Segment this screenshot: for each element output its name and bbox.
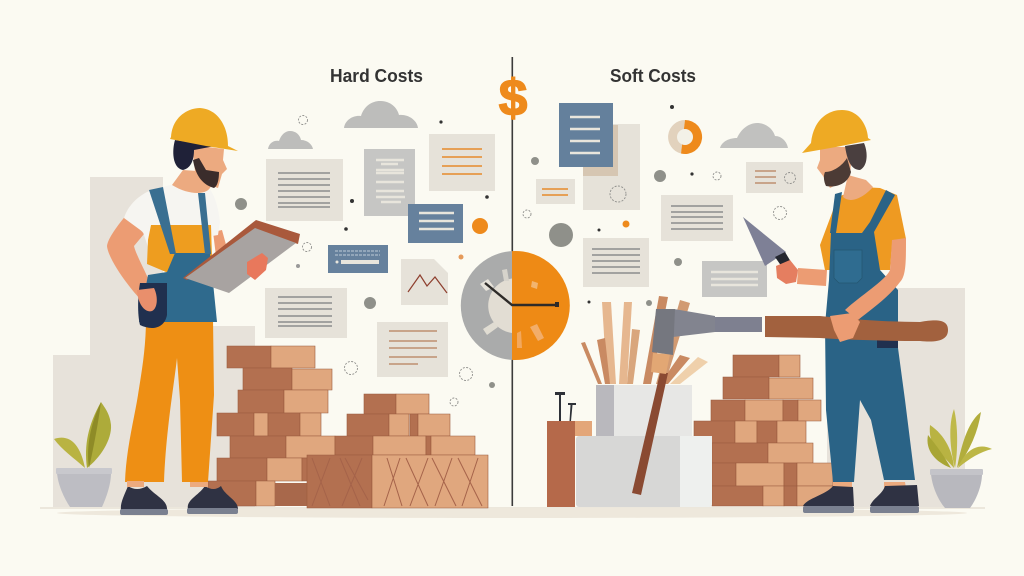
floor band bbox=[40, 507, 985, 518]
hand on hammer bbox=[830, 313, 860, 342]
title: Soft Costs: Soft Costs bbox=[610, 66, 696, 86]
orange shirt lower bbox=[147, 225, 212, 272]
title: Hard Costs: Hard Costs bbox=[330, 66, 423, 86]
wood sticks bbox=[581, 296, 708, 384]
panel: soft blue document bbox=[559, 103, 613, 167]
decorative dots bbox=[235, 105, 694, 388]
tool pouch bbox=[138, 283, 167, 328]
hammer handle end behind worker bbox=[632, 353, 670, 495]
left arm holding trowel bbox=[797, 268, 827, 286]
hand left bbox=[137, 288, 157, 311]
bib pocket bbox=[834, 250, 862, 283]
panel: hard orange-lines document bbox=[429, 134, 495, 191]
hand holding trowel bbox=[776, 260, 798, 284]
panel: soft beige document bbox=[583, 124, 640, 210]
panel: hard blue card bbox=[408, 204, 463, 243]
overalls bbox=[825, 190, 915, 482]
panel: soft small card bbox=[536, 179, 575, 204]
decorative gear icons bbox=[298, 116, 786, 406]
tablet bbox=[183, 220, 300, 280]
pants bbox=[125, 318, 214, 482]
clock bbox=[461, 251, 570, 360]
panel: soft document 1 bbox=[661, 195, 733, 241]
bricks: right stack bbox=[694, 355, 833, 506]
apron bbox=[139, 253, 217, 322]
background wall blocks bbox=[53, 177, 965, 507]
trowel bbox=[743, 217, 791, 267]
cloud: hard small bbox=[268, 131, 313, 149]
panel: hard document 1 bbox=[266, 159, 343, 221]
hair bbox=[845, 143, 867, 170]
shoes: soft costs worker bbox=[803, 482, 919, 513]
beard bbox=[824, 158, 851, 186]
white box lower bbox=[576, 436, 712, 507]
bricks: center stack bbox=[335, 394, 475, 455]
icon: dollar sign: $ bbox=[499, 69, 527, 126]
pocket below handle bbox=[877, 340, 898, 348]
white box upper bbox=[596, 385, 692, 436]
panel: hard line chart bbox=[401, 259, 448, 305]
white shirt bbox=[124, 185, 220, 247]
beard bbox=[193, 158, 219, 188]
cloud: hard large bbox=[344, 101, 418, 128]
worker: soft costs bbox=[797, 110, 915, 482]
icon: donut chart bbox=[668, 120, 702, 154]
nails on block bbox=[547, 392, 592, 507]
upper body shirt bbox=[820, 187, 906, 270]
right arm bbox=[845, 238, 906, 320]
panel: soft document 2 bbox=[583, 238, 649, 287]
hard hat bbox=[170, 108, 238, 151]
left worker shoes bbox=[120, 481, 238, 515]
bricks: left stack bbox=[208, 346, 335, 506]
worker: hard costs bbox=[107, 108, 300, 515]
plant right bbox=[927, 409, 992, 508]
right forearm bbox=[213, 230, 228, 256]
hand holding tablet bbox=[247, 253, 268, 280]
neck and head bbox=[843, 175, 873, 200]
plant left bbox=[54, 402, 112, 507]
panel: hard document 3 bbox=[377, 322, 448, 377]
hair bbox=[173, 140, 215, 170]
arm left bbox=[107, 214, 154, 300]
panel: hard blue label bbox=[328, 245, 388, 273]
panel: soft card with gear bbox=[746, 162, 803, 193]
panel: hard document 2 bbox=[265, 288, 347, 338]
neck and face bbox=[172, 170, 211, 193]
center divider line bbox=[512, 57, 513, 506]
apron straps bbox=[149, 187, 211, 254]
wooden crate with strapping bbox=[307, 455, 488, 508]
panel: hard grey document bbox=[364, 149, 415, 216]
overall left strap bbox=[830, 192, 842, 233]
cloud: soft bbox=[720, 123, 788, 148]
panel: soft grey card bbox=[702, 261, 767, 297]
hard hat bbox=[802, 110, 871, 153]
hammer bbox=[652, 309, 948, 355]
